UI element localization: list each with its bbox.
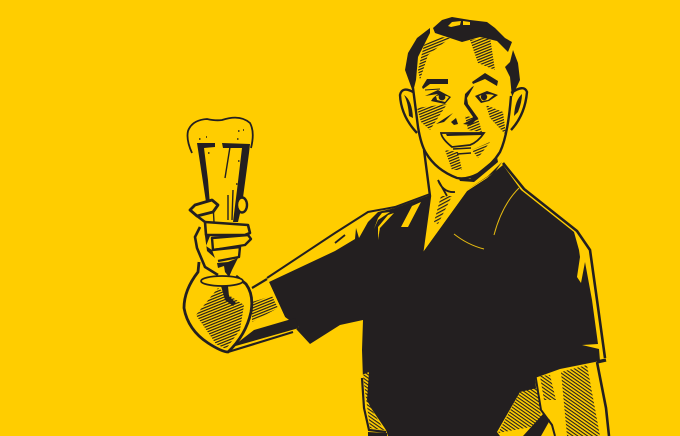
middle finger	[212, 235, 251, 250]
cheek hatching	[417, 104, 447, 130]
right fingertip	[237, 198, 247, 212]
right eye	[475, 91, 498, 103]
shoulder folds	[374, 202, 421, 240]
shirt creases	[454, 188, 519, 249]
left eye	[425, 90, 451, 104]
glass shading right	[222, 143, 250, 222]
right arm	[498, 362, 609, 436]
sleeve cuff	[597, 360, 606, 362]
shoulder hatching	[378, 224, 386, 240]
glass shading left	[197, 143, 215, 205]
mouth	[441, 133, 484, 147]
neck	[422, 150, 502, 254]
base shadow	[221, 286, 236, 306]
left thumb	[190, 200, 218, 216]
foam	[188, 118, 253, 153]
hair hatching	[418, 37, 450, 80]
glass base	[201, 276, 243, 286]
shirt	[267, 163, 606, 436]
forearm	[184, 262, 299, 352]
shoulder outline	[503, 163, 605, 358]
chin shadow	[458, 157, 498, 182]
arm hatching	[561, 365, 600, 436]
foam bubbles	[199, 130, 244, 184]
left ear	[400, 90, 417, 133]
glass streaks	[213, 147, 233, 222]
right ear	[511, 88, 527, 130]
beer glass	[188, 118, 253, 222]
nose shadow	[464, 86, 478, 126]
stem	[217, 258, 238, 277]
hair	[433, 17, 512, 52]
arm shadow wedge	[232, 318, 299, 347]
knuckle shadow	[205, 236, 215, 258]
palm	[195, 222, 252, 275]
arm hatching	[196, 288, 244, 349]
head	[400, 17, 527, 182]
shirt side hem	[362, 366, 387, 436]
sleeve crease	[335, 235, 345, 243]
sleeve outline	[267, 194, 430, 278]
eyebrows	[422, 79, 448, 89]
face outline	[413, 30, 511, 178]
foam outline	[188, 118, 253, 153]
top finger	[205, 222, 250, 235]
lower finger	[212, 247, 240, 261]
hand	[190, 198, 252, 306]
